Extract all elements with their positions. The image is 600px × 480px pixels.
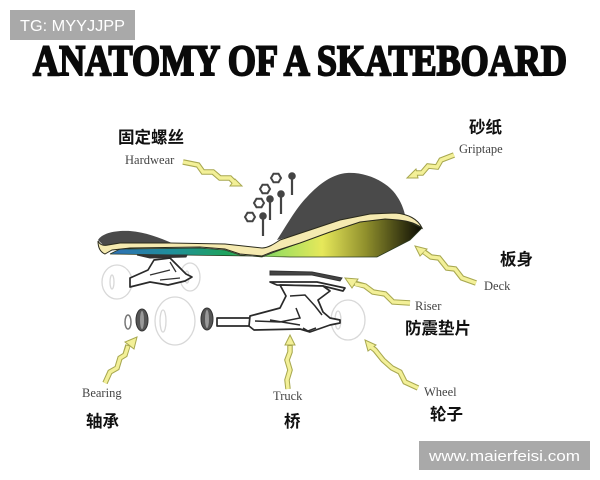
griptape: left: [98, 231, 172, 250]
griptape: right: [277, 173, 405, 240]
exploded wheel and bearings: [125, 297, 213, 345]
label: riser: 防震垫片: [405, 318, 471, 338]
watermark: site: [419, 441, 590, 470]
label: griptape: [459, 117, 503, 156]
label: riser: [405, 299, 471, 338]
label: hardware: 固定螺丝: [118, 127, 184, 147]
arrow: truck: [285, 335, 295, 389]
deck underside gradient: [110, 219, 422, 257]
deck wood layer: [98, 213, 422, 256]
label: riser: Riser: [415, 299, 442, 313]
arrow: bearing: [105, 337, 137, 383]
label: wheel: [424, 385, 463, 424]
arrow: griptape: [407, 155, 454, 178]
label: bearing: 轴承: [86, 412, 120, 431]
watermark: site: www.maierfeisi.com: [428, 448, 580, 465]
label: deck: [484, 250, 533, 293]
label: deck: Deck: [484, 279, 511, 293]
skateboard deck: [98, 173, 422, 257]
main truck: [217, 282, 365, 340]
label: truck: Truck: [273, 389, 303, 403]
label: bearing: Bearing: [82, 386, 122, 400]
label: truck: [273, 389, 303, 431]
arrow: deck: [415, 246, 476, 283]
label: griptape: Griptape: [459, 142, 503, 156]
label: hardware: [118, 127, 184, 167]
riser pad: [270, 271, 342, 281]
watermark: TG: [10, 10, 135, 40]
label: wheel: Wheel: [424, 385, 457, 399]
label: truck: 桥: [284, 412, 301, 431]
label: bearing: [82, 386, 122, 431]
top truck assembly: [102, 255, 200, 299]
hardware: nuts and bolts: [245, 172, 296, 236]
label: deck: 板身: [500, 250, 533, 269]
label: griptape: 砂纸: [469, 117, 502, 137]
label: wheel: 轮子: [430, 405, 463, 424]
arrow: wheel: [365, 340, 418, 388]
arrow: riser: [345, 278, 410, 303]
watermark: TG: TG: MYYJJPP: [20, 18, 125, 35]
label: hardware: Hardwear: [125, 153, 175, 167]
arrow: hardwear: [183, 162, 242, 186]
